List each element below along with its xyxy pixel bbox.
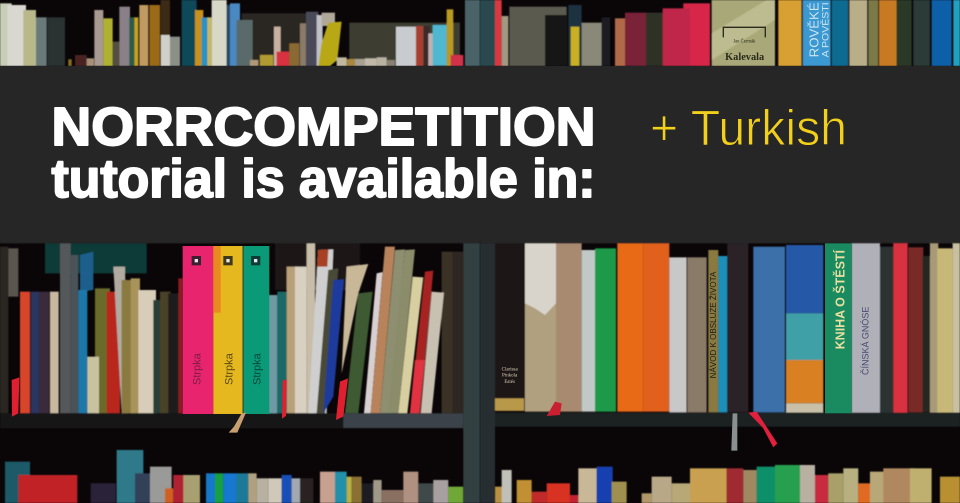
book title: Navod k obsluze zivota: NÁVOD K OBSLUZE ŽIVOTA	[709, 271, 718, 378]
book: pink Strpka: Strpka	[192, 352, 204, 385]
book: pink Strpka	[183, 246, 213, 414]
book: Kniha o stesti	[825, 243, 852, 413]
book: yellow Strpka: Strpka	[224, 352, 236, 385]
lower shelf right books	[480, 240, 960, 503]
heading: NORRCOMPETITION tutorial is available in: NORRCOMPETITION	[52, 98, 596, 157]
top shelf right books	[480, 0, 960, 66]
book author: Clarissa Pinkola Estes: Pinkola	[502, 374, 518, 379]
spine text: A povesti: A POVĚSTI	[821, 2, 831, 57]
book title: Kalevala: Kalevala	[725, 52, 764, 63]
heading: NORRCOMPETITION tutorial is available in: tutorial is available in:	[52, 150, 596, 209]
bookmark ribbons	[12, 377, 348, 433]
language callout: + Turkish: + Turkish	[650, 100, 847, 156]
book author: Clarissa Pinkola Estes: Estés	[504, 380, 515, 385]
book author: Clarissa Pinkola Estes: Clarissa	[502, 367, 518, 372]
lower shelf left books	[0, 240, 480, 503]
title frame on Kalevala book	[723, 27, 765, 37]
book author: Jan Cermak: Jan Čermák	[733, 39, 756, 45]
banner: dark strip	[0, 66, 960, 241]
heading: NORRCOMPETITION tutorial is available in	[52, 98, 596, 209]
book: green Strpka: Strpka	[252, 352, 264, 385]
top shelf left books	[0, 0, 480, 66]
spine text: Roveke: ROVĚKÉ	[806, 2, 821, 57]
book: Kniha o stesti: KNIHA O ŠTĚSTÍ	[833, 250, 848, 349]
bottom row books left	[5, 450, 463, 503]
book: yellow Strpka	[213, 246, 243, 414]
bottom row books right	[495, 465, 960, 503]
book title: Cinska gnose: ČÍNSKÁ GNÓSE	[861, 307, 871, 375]
book: green Strpka	[243, 246, 269, 414]
bookmark ribbons	[547, 402, 777, 451]
